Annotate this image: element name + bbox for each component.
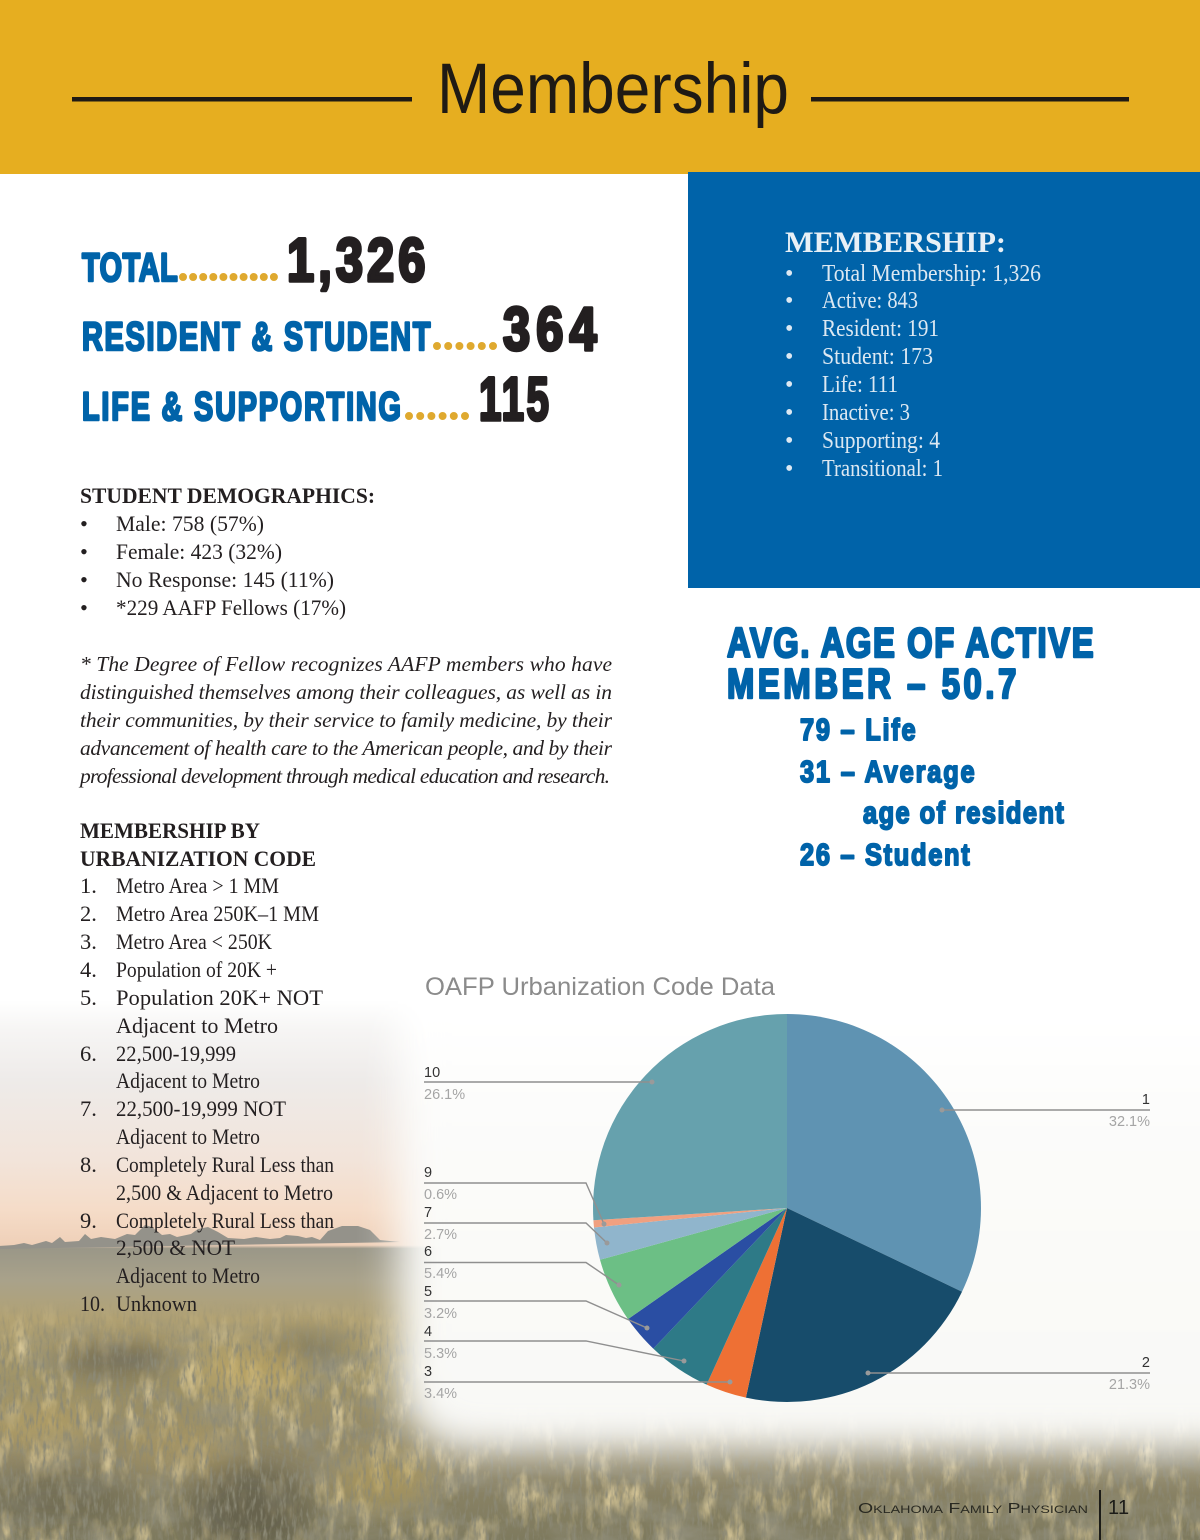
- fellow note: [78, 652, 613, 788]
- slice labels: 4: [424, 1324, 432, 1340]
- membership items: Student: 173: [822, 344, 933, 370]
- membership items: •: [785, 288, 793, 314]
- average age block: age of resident: [863, 796, 1064, 831]
- urbanization code list: Unknown: [116, 1291, 197, 1316]
- urbanization code list: 5.: [80, 985, 97, 1010]
- fellow note: * The Degree of Fellow recognizes AAFP members who have: [80, 652, 612, 676]
- urbanization code list: 22,500-19,999: [116, 1041, 236, 1066]
- average age block: 31 – Average: [800, 755, 975, 790]
- student demographics: No Response: 145 (11%): [116, 567, 334, 592]
- membership items: Total Membership: 1,326: [822, 261, 1041, 287]
- stat: total: 1,326: [287, 226, 425, 294]
- membership items: •: [785, 261, 793, 287]
- membership items: Active: 843: [822, 288, 918, 314]
- slice labels: 32.1%: [1109, 1114, 1150, 1130]
- urbanization code list: 7.: [80, 1096, 97, 1121]
- student demographics: *229 AAFP Fellows (17%): [116, 595, 346, 620]
- footer: Oklahoma Family Physician: [858, 1500, 1088, 1517]
- urbanization code list: 3.: [80, 929, 97, 954]
- average age block: AVG. AGE OF ACTIVE: [727, 619, 1094, 666]
- urbanization code list: Metro Area 250K–1 MM: [116, 901, 319, 926]
- urbanization code list: MEMBERSHIP BY: [80, 818, 260, 843]
- slice labels: 5.3%: [424, 1346, 457, 1362]
- student demographics: •: [80, 595, 88, 620]
- chart title: OAFP Urbanization Code Data: [425, 973, 775, 1001]
- urbanization code list: 4.: [80, 957, 97, 982]
- fellow note: advancement of health care to the American people, and by their: [80, 736, 613, 760]
- membership items: Transitional: 1: [822, 456, 943, 482]
- slice labels: 5.4%: [424, 1266, 457, 1282]
- slice labels: 1: [1142, 1092, 1150, 1108]
- panel heading: MEMBERSHIP:: [785, 226, 1006, 259]
- membership items: •: [785, 372, 793, 398]
- slice labels: 5: [424, 1284, 432, 1300]
- urbanization code list: 8.: [80, 1152, 97, 1177]
- slice labels: 21.3%: [1109, 1377, 1150, 1393]
- header band: [0, 0, 1200, 174]
- membership items: Life: 111: [822, 372, 898, 398]
- urbanization code list: Adjacent to Metro: [116, 1263, 260, 1288]
- average age block: 79 – Life: [800, 713, 916, 748]
- slice labels: 0.6%: [424, 1187, 457, 1203]
- membership items: •: [785, 428, 793, 454]
- slice labels: 2: [1142, 1355, 1150, 1371]
- stat: resident and student: RESIDENT & STUDENT: [82, 314, 430, 359]
- urbanization code list: 9.: [80, 1208, 97, 1233]
- slice labels: 26.1%: [424, 1087, 465, 1103]
- urbanization code list: Metro Area > 1 MM: [116, 873, 279, 898]
- background: white fog behind chart: [398, 900, 1200, 1452]
- stat: total: TOTAL: [82, 245, 178, 290]
- urbanization code list: 2,500 & Adjacent to Metro: [116, 1180, 333, 1205]
- leader lines: [424, 1080, 1150, 1384]
- membership items: •: [785, 400, 793, 426]
- student demographics: •: [80, 539, 88, 564]
- student demographics: •: [80, 511, 88, 536]
- urbanization code list: 10.: [80, 1291, 105, 1316]
- stat: resident and student: 364: [503, 295, 597, 363]
- membership items: Resident: 191: [822, 316, 939, 342]
- urbanization code list: 2,500 & NOT: [116, 1235, 235, 1260]
- urbanization code list: Adjacent to Metro: [116, 1068, 260, 1093]
- urbanization code list: 2.: [80, 901, 97, 926]
- urbanization code list: [80, 818, 334, 1316]
- membership items: •: [785, 316, 793, 342]
- slice labels: [424, 1065, 1150, 1402]
- slice labels: 2.7%: [424, 1227, 457, 1243]
- slice labels: 6: [424, 1244, 432, 1260]
- membership items: [785, 261, 1041, 482]
- background: wheat field photo: [0, 1000, 1200, 1540]
- slice labels: 10: [424, 1065, 440, 1081]
- student demographics: [80, 483, 375, 620]
- fellow note: their communities, by their service to family medicine, by their: [80, 708, 613, 732]
- stat: resident and student: [82, 295, 597, 363]
- stat: total: [82, 226, 425, 294]
- urbanization code list: Metro Area < 250K: [116, 929, 273, 954]
- urbanization code list: 6.: [80, 1041, 97, 1066]
- average age block: [727, 619, 1094, 873]
- urbanization code list: URBANIZATION CODE: [80, 846, 316, 871]
- urbanization code list: Adjacent to Metro: [116, 1013, 278, 1038]
- pie chart: OAFP urbanization code data: [424, 973, 1150, 1402]
- average age block: 26 – Student: [800, 838, 970, 873]
- membership items: •: [785, 456, 793, 482]
- stat: life and supporting: [82, 365, 549, 433]
- slice labels: 7: [424, 1205, 432, 1221]
- urbanization code list: Population of 20K +: [116, 957, 277, 982]
- student demographics: •: [80, 567, 88, 592]
- slice labels: 9: [424, 1165, 432, 1181]
- student demographics: Female: 423 (32%): [116, 539, 282, 564]
- fellow note: professional development through medical education and research.: [78, 764, 610, 788]
- urbanization code list: Adjacent to Metro: [116, 1124, 260, 1149]
- stat: life and supporting: 115: [479, 365, 549, 433]
- urbanization code list: Completely Rural Less than: [116, 1152, 334, 1177]
- panel: membership list: [688, 172, 1200, 588]
- average age block: MEMBER – 50.7: [727, 660, 1016, 707]
- urbanization code list: 1.: [80, 873, 97, 898]
- urbanization code list: 22,500-19,999 NOT: [116, 1096, 286, 1121]
- urbanization code list: Completely Rural Less than: [116, 1208, 334, 1233]
- urbanization code list: Population 20K+ NOT: [116, 985, 323, 1010]
- membership items: •: [785, 344, 793, 370]
- stat: life and supporting: LIFE & SUPPORTING: [82, 384, 401, 429]
- footer: 11: [1108, 1497, 1129, 1519]
- student demographics: Male: 758 (57%): [116, 511, 264, 536]
- membership items: Inactive: 3: [822, 400, 910, 426]
- student demographics: STUDENT DEMOGRAPHICS:: [80, 483, 375, 508]
- slice labels: 3.4%: [424, 1386, 457, 1402]
- membership items: Supporting: 4: [822, 428, 940, 454]
- pie slices: [593, 1014, 981, 1402]
- slice labels: 3: [424, 1364, 432, 1380]
- slice labels: 3.2%: [424, 1306, 457, 1322]
- title: Membership: [437, 50, 789, 129]
- top fade over background: [0, 174, 1200, 1000]
- footer: [858, 1490, 1129, 1540]
- fellow note: distinguished themselves among their colleagues, as well as in: [80, 680, 612, 704]
